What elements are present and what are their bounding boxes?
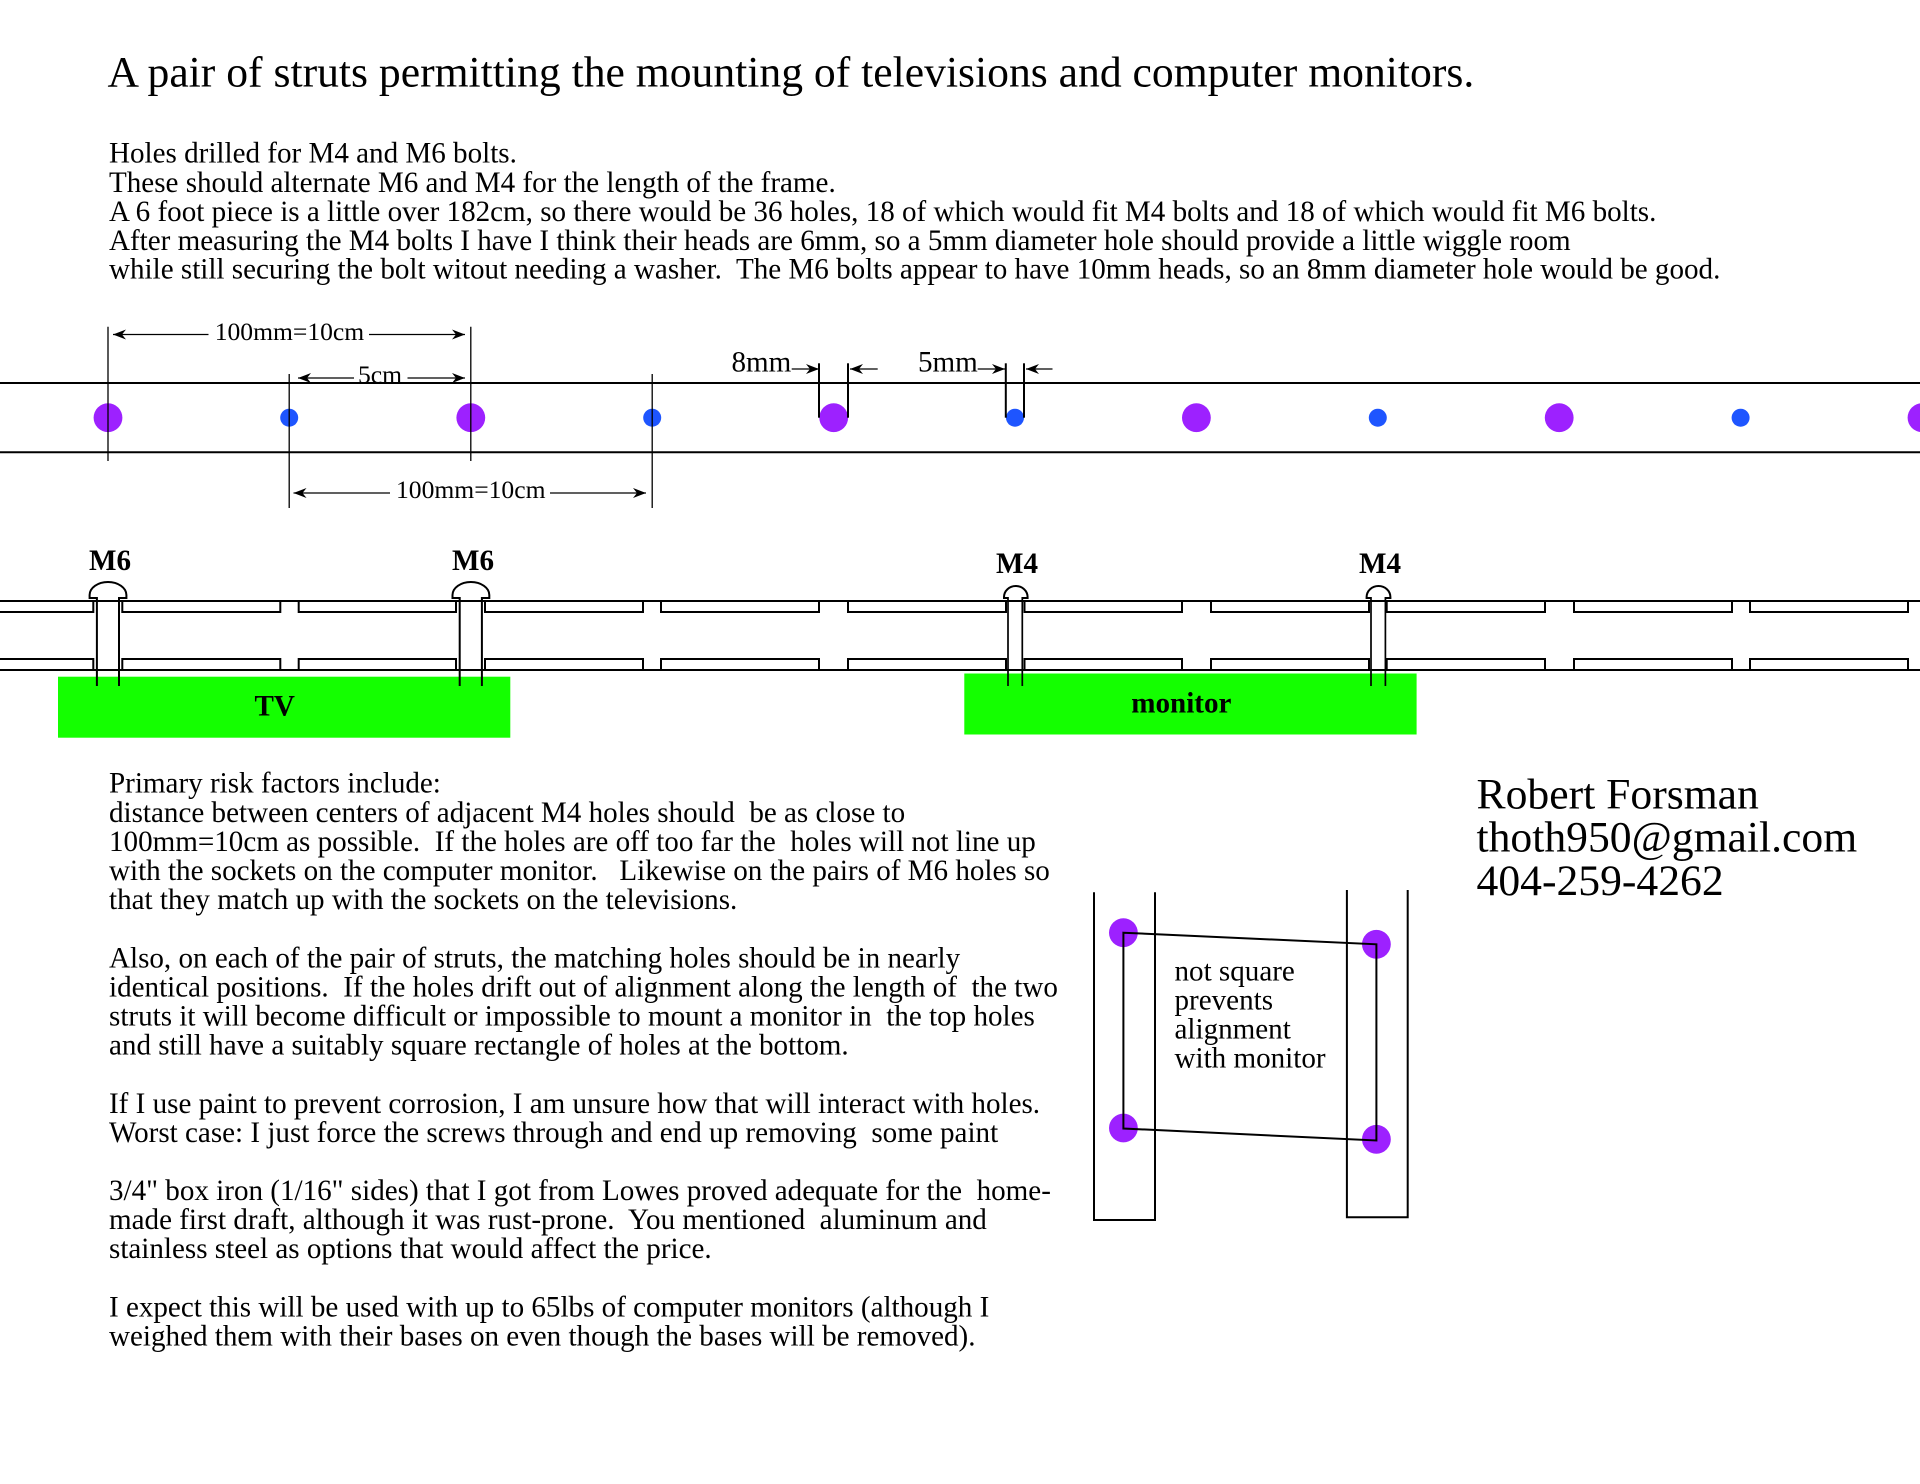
holes: M6 purple and M4 blue: [94, 403, 1920, 432]
caption: with monitor: [1174, 1043, 1326, 1075]
bolt: M6 right: M6: [452, 545, 494, 577]
diagram: strut top view with holes: [0, 317, 1920, 508]
panel: TV block: TV: [254, 691, 295, 723]
bolt: M4 left: M4: [996, 548, 1038, 580]
text block: primary risk factors: If I use paint to prevent corrosion, I am unsure how that will interact with holes.: [109, 1088, 1040, 1120]
text block: primary risk factors: made first draft, although it was rust-prone. You mentioned aluminum and: [109, 1204, 987, 1236]
caption: prevents: [1174, 985, 1273, 1017]
bolt: M6 left: M6: [89, 545, 131, 577]
diagram: strut cross-section: [0, 545, 1920, 686]
panel: monitor block: [964, 674, 1417, 734]
right strut: [1347, 890, 1408, 1217]
left strut: [1094, 892, 1155, 1220]
panel: monitor block: monitor: [1131, 688, 1232, 720]
bolt: M4 left: [996, 548, 1038, 686]
dimension: 5mm: [918, 347, 1052, 418]
dimension: 5cm: 5cm: [358, 360, 402, 389]
bolt: M6 left: [89, 545, 131, 686]
text block: primary risk factors: that they match up with the sockets on the televisions.: [109, 884, 737, 916]
text block: hole specifications: After measuring the M4 bolts I have I think their heads are 6mm, so a 5mm diameter hole should provide a little wiggle room: [109, 225, 1571, 257]
text block: primary risk factors: weighed them with their bases on even though the bases will be removed).: [109, 1321, 975, 1353]
text block: primary risk factors: Worst case: I just force the screws through and end up removing some paint: [109, 1117, 998, 1149]
caption: not square: [1174, 956, 1295, 988]
contact details: Robert Forsman: [1476, 770, 1759, 818]
text block: primary risk factors: 100mm=10cm as possible. If the holes are off too far the holes will not line up: [109, 826, 1036, 858]
text block: primary risk factors: and still have a suitably square rectangle of holes at the bottom.: [109, 1030, 849, 1062]
dimension: 100mm=10cm upper: 100mm=10cm: [215, 317, 364, 346]
dimension: 5mm: 5mm: [918, 347, 978, 379]
text block: primary risk factors: [109, 768, 1058, 1353]
contact details: [1476, 770, 1857, 905]
dimension: 100mm=10cm lower: 100mm=10cm: [396, 475, 546, 504]
text block: hole specifications: [109, 138, 1720, 286]
bolt: M6 right: [452, 545, 494, 686]
text block: primary risk factors: identical positions. If the holes drift out of alignment along the length of the two: [109, 971, 1058, 1003]
text block: primary risk factors: struts it will become difficult or impossible to mount a monitor in the top holes: [109, 1000, 1035, 1032]
holes: [1109, 918, 1391, 1154]
text block: primary risk factors: with the sockets on the computer monitor. Likewise on the pairs of M6 holes so: [109, 855, 1050, 887]
bolt: M4 right: [1359, 548, 1401, 686]
contact details: 404-259-4262: [1476, 857, 1724, 905]
panel: TV block: [58, 677, 510, 738]
strut rails: [0, 383, 1920, 452]
text block: primary risk factors: Primary risk factors include:: [109, 768, 441, 800]
title: A pair of struts permitting the mounting of televisions and computer monitors.: [108, 49, 1474, 97]
top inner wall segments: [0, 601, 1908, 612]
skewed rectangle: [1123, 933, 1376, 1140]
outer walls: [0, 601, 1920, 670]
text block: primary risk factors: stainless steel as options that would affect the price.: [109, 1233, 712, 1265]
text block: hole specifications: These should alternate M6 and M4 for the length of the frame.: [109, 167, 836, 199]
text block: hole specifications: Holes drilled for M4 and M6 bolts.: [109, 138, 517, 170]
contact details: thoth950@gmail.com: [1476, 814, 1857, 862]
text block: primary risk factors: 3/4" box iron (1/16" sides) that I got from Lowes proved adequate for the home-: [109, 1175, 1051, 1207]
dimension: 8mm: 8mm: [732, 347, 792, 379]
caption: alignment: [1174, 1014, 1291, 1046]
caption: [1174, 956, 1326, 1075]
text block: primary risk factors: distance between centers of adjacent M4 holes should be as close to: [109, 797, 905, 829]
diagram: misaligned struts: [1094, 890, 1408, 1220]
text block: hole specifications: while still securing the bolt witout needing a washer. The M6 bolts appear to have 10mm heads, so an 8mm diameter hole would be good.: [109, 254, 1720, 286]
text block: hole specifications: A 6 foot piece is a little over 182cm, so there would be 36 holes, 18 of which would fit M4 bolts and 18 of which would fit M6 bolts.: [109, 196, 1656, 228]
text block: primary risk factors: Also, on each of the pair of struts, the matching holes should be in nearly: [109, 942, 961, 974]
text block: primary risk factors: I expect this will be used with up to 65lbs of computer monitors (although I: [109, 1292, 989, 1324]
bolt: M4 right: M4: [1359, 548, 1401, 580]
bottom inner wall segments: [0, 659, 1908, 670]
